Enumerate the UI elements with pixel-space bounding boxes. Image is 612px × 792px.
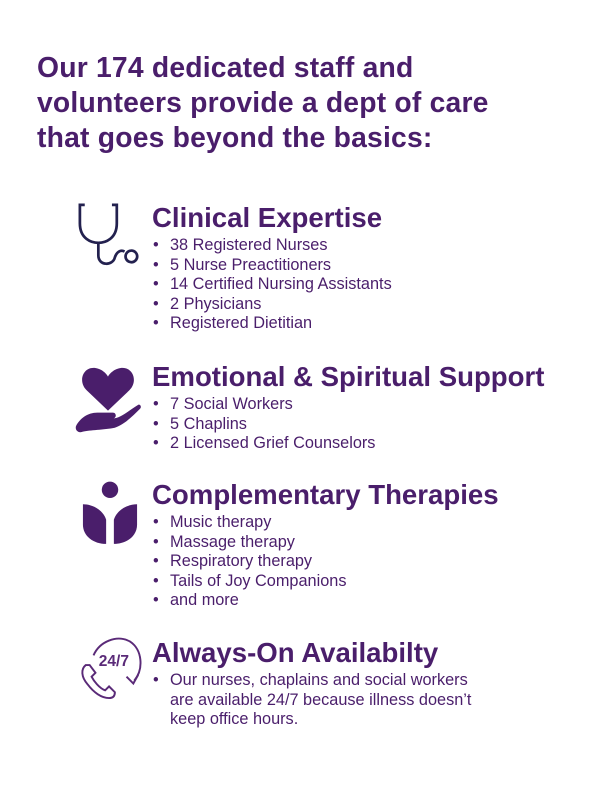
icon: heart in hand — [76, 368, 141, 432]
list: are available 24/7 because illness doesn’t — [170, 690, 471, 708]
list — [154, 513, 346, 609]
list: 5 Chaplins — [170, 414, 247, 432]
icon: 24/7 phone: 24/7 — [99, 653, 129, 670]
list — [154, 236, 392, 332]
list: Music therapy — [170, 513, 271, 531]
section: complementary therapies — [152, 479, 499, 609]
list: Massage therapy — [170, 532, 295, 550]
list: Our nurses, chaplains and social workers — [170, 671, 468, 689]
list — [154, 671, 472, 728]
heading: Clinical Expertise — [152, 202, 382, 233]
section: always-on availability — [152, 637, 472, 728]
title — [37, 51, 489, 153]
list: 7 Social Workers — [170, 395, 293, 413]
title: that goes beyond the basics: — [37, 121, 433, 153]
list — [154, 395, 375, 452]
list: and more — [170, 591, 239, 609]
title: volunteers provide a dept of care — [37, 86, 489, 118]
section: clinical expertise — [152, 202, 392, 332]
list: Registered Dietitian — [170, 314, 312, 332]
icon: stethoscope — [78, 204, 139, 266]
heading: Emotional & Spiritual Support — [152, 361, 544, 392]
icon: 24/7 phone — [81, 638, 142, 699]
list: 14 Certified Nursing Assistants — [170, 275, 392, 293]
heading: Complementary Therapies — [152, 479, 499, 510]
list: Tails of Joy Companions — [170, 572, 346, 590]
list: Respiratory therapy — [170, 552, 312, 570]
heading: Always-On Availabilty — [152, 637, 438, 668]
icon: person/leaves — [82, 482, 138, 544]
title: Our 174 dedicated staff and — [37, 51, 414, 83]
list: 5 Nurse Preactitioners — [170, 256, 331, 274]
section: emotional support — [152, 361, 544, 452]
list: 2 Licensed Grief Counselors — [170, 434, 375, 452]
list: 2 Physicians — [170, 294, 261, 312]
list: 38 Registered Nurses — [170, 236, 327, 254]
list: keep office hours. — [170, 710, 298, 728]
